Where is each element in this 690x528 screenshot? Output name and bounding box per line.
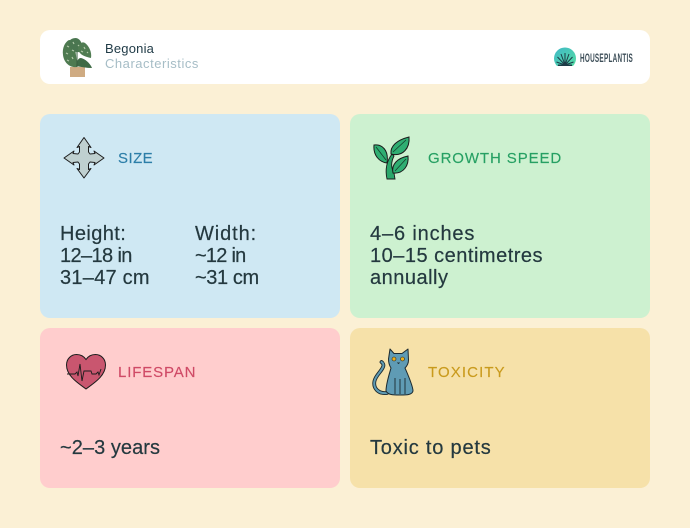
width values: ~12 in [195, 245, 246, 267]
title text [105, 41, 199, 70]
growth values: 4–6 inches [370, 223, 475, 245]
panel: size [40, 114, 340, 318]
header bar [40, 30, 650, 84]
heading: toxicity: TOXICITY [428, 364, 506, 380]
growth values [370, 223, 543, 289]
icon: leafy sprout [373, 136, 410, 180]
lifespan value: ~2–3 years [60, 437, 160, 459]
heading: lifespan: LIFESPAN [118, 364, 196, 380]
growth values: annually [370, 267, 449, 289]
height values: Height: [60, 223, 126, 245]
heading: size: SIZE [118, 150, 153, 166]
width values [195, 223, 259, 289]
height values: 12–18 in [60, 245, 132, 267]
width values: ~31 cm [195, 267, 259, 289]
height values: 31–47 cm [60, 267, 150, 289]
height values [60, 223, 150, 289]
icon: blue cat [372, 348, 414, 396]
heading: growth speed: GROWTH SPEED [428, 150, 562, 166]
logo: Houseplantis: HOUSEPLANTIS [580, 51, 633, 65]
icon: begonia plant in pot [62, 38, 92, 77]
width values: Width: [195, 223, 257, 245]
toxicity value: Toxic to pets [370, 437, 492, 459]
icon: heart with pulse [66, 354, 106, 390]
panel: toxicity [350, 328, 650, 488]
logo: Houseplantis [554, 48, 633, 66]
panel: lifespan [40, 328, 340, 488]
panel: growth speed [350, 114, 650, 318]
growth values: 10–15 centimetres [370, 245, 543, 267]
title text: Characteristics [105, 56, 199, 70]
icon: four-way arrows [64, 137, 104, 178]
title text: Begonia [105, 41, 154, 56]
